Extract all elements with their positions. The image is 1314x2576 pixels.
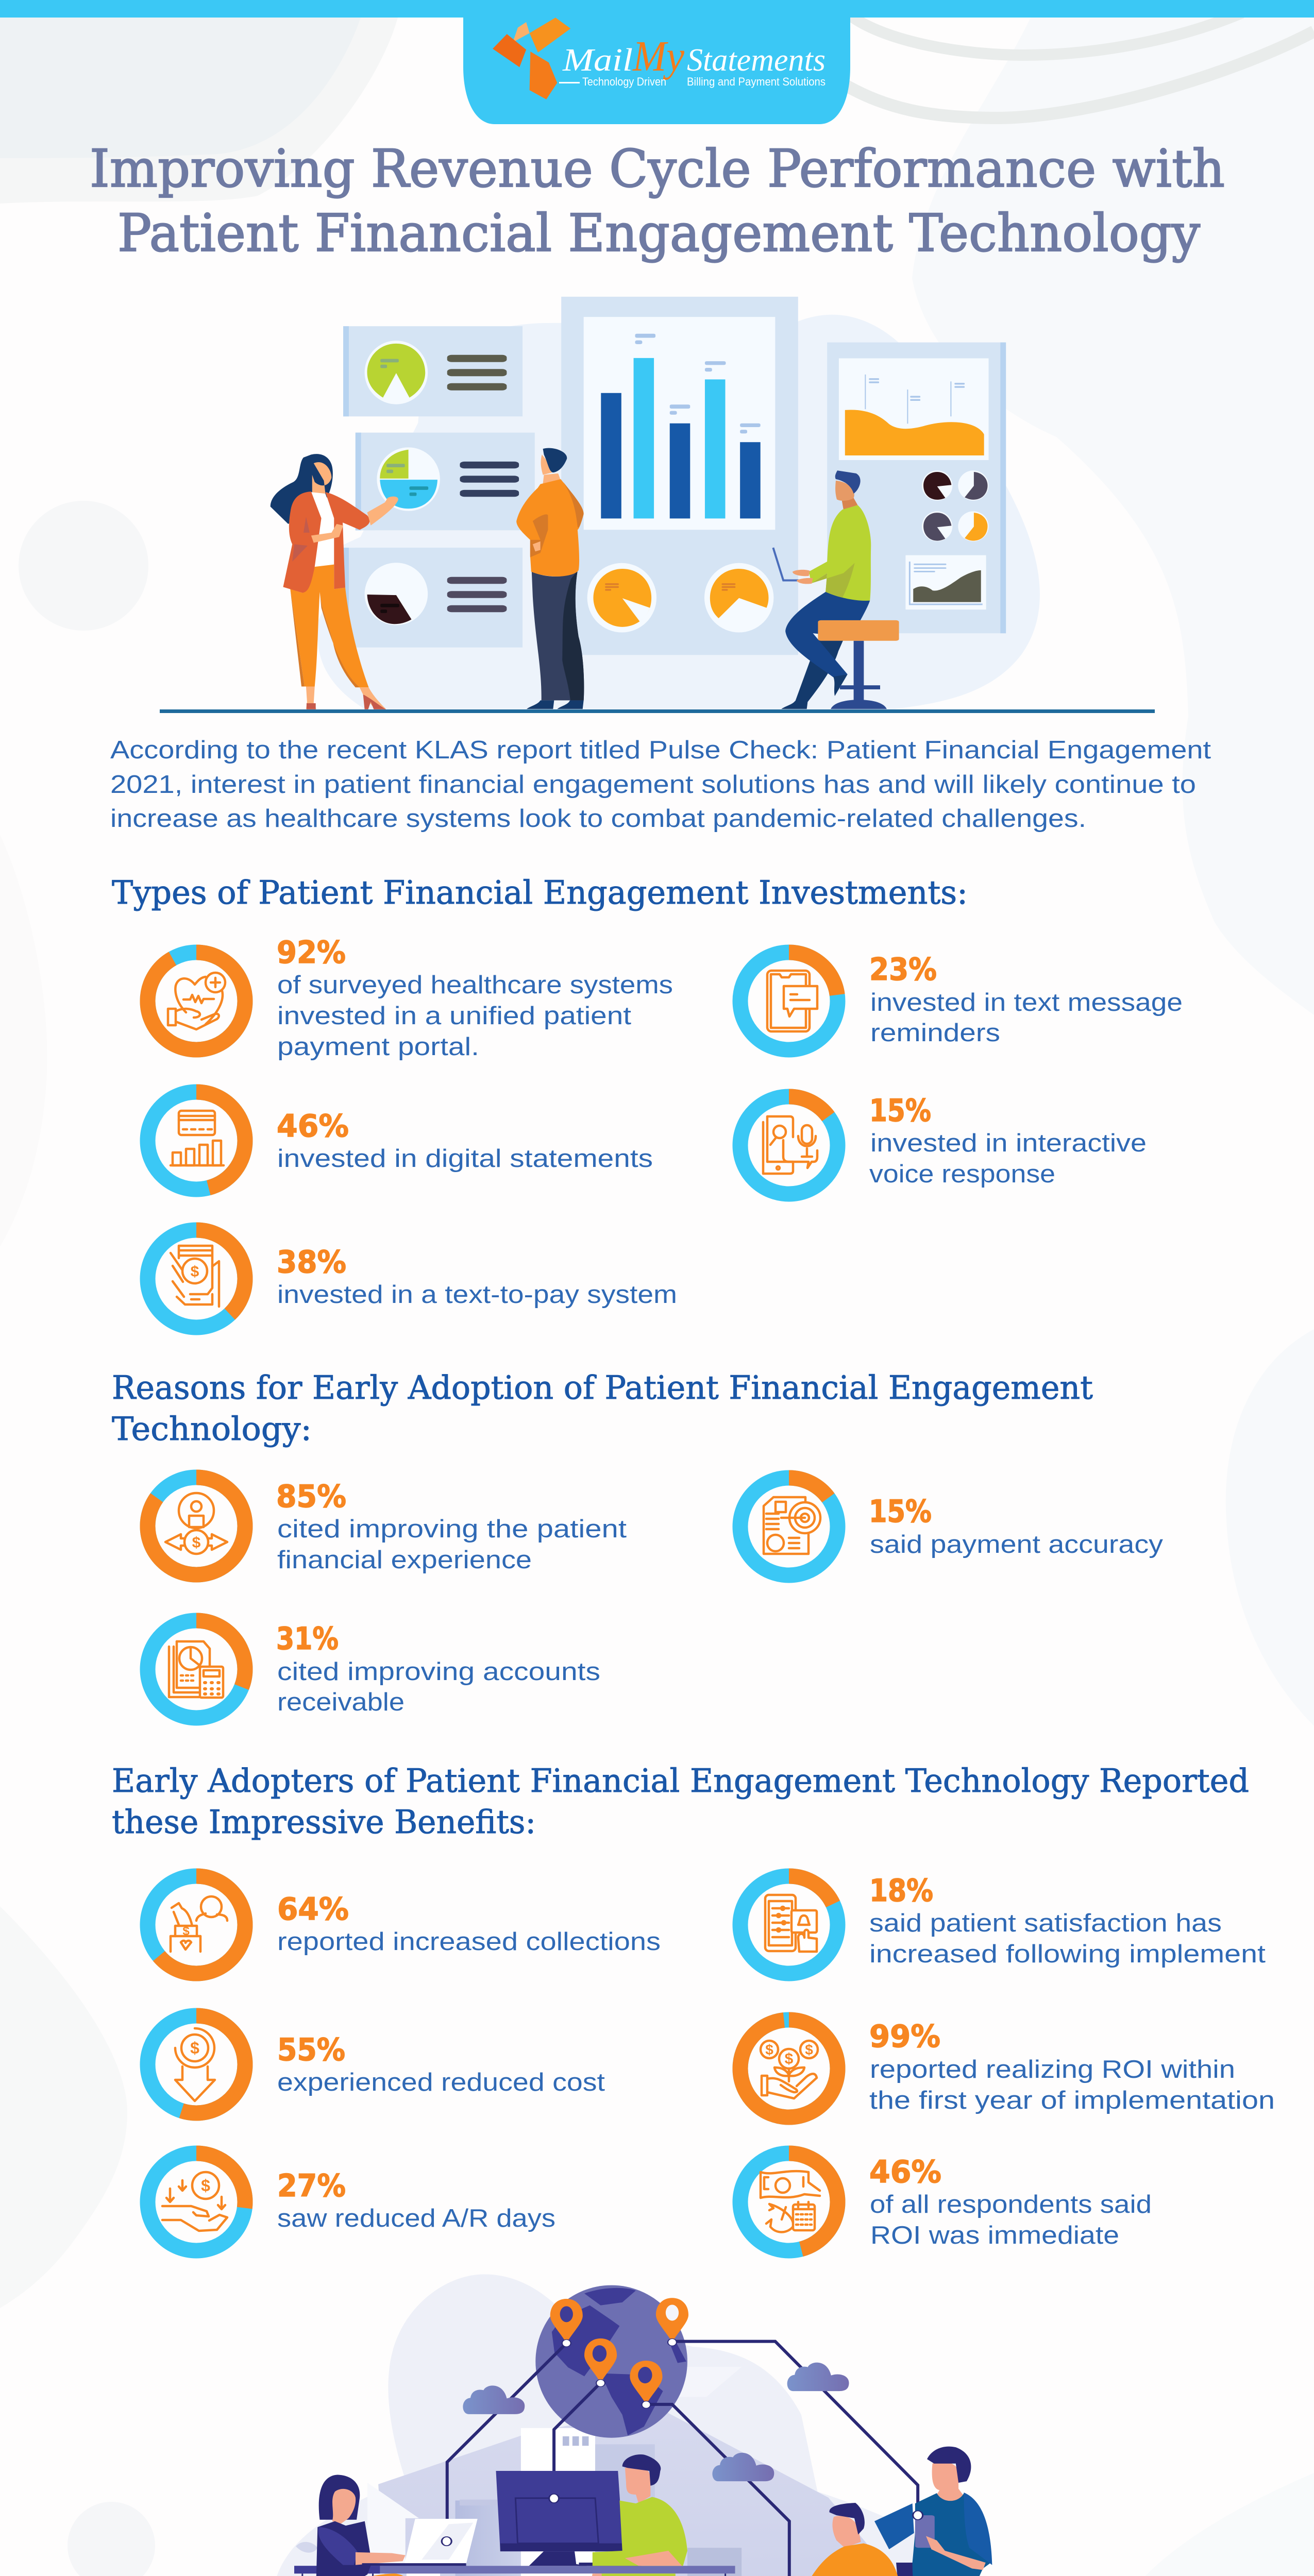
15% text: 15% bbox=[869, 1494, 932, 1530]
donut 15% with voice icon bbox=[740, 1096, 838, 1194]
18% text: said patient satisfaction has bbox=[869, 1909, 1222, 1937]
donut 99% with money plant icon: $ bbox=[805, 2042, 813, 2058]
99% text bbox=[869, 2019, 1275, 2114]
stat: 18% patient satisfaction bbox=[740, 1873, 1266, 1973]
46% text bbox=[277, 1108, 653, 1173]
38% text: 38% bbox=[277, 1244, 346, 1280]
stat: 27% reduced A/R days bbox=[147, 2154, 555, 2250]
logo wordmark: Statements bbox=[687, 43, 826, 78]
stat: 64% increased collections bbox=[147, 1876, 661, 1973]
top bar bbox=[0, 0, 1314, 18]
55% text: experienced reduced cost bbox=[277, 2069, 605, 2096]
64% text: 64% bbox=[277, 1891, 349, 1927]
monitor bbox=[496, 2471, 641, 2566]
intro paragraph: 2021, interest in patient financial engagement solutions has and will likely continue to bbox=[110, 771, 1196, 799]
64% text bbox=[277, 1891, 661, 1956]
46% text: 46% bbox=[277, 1108, 349, 1144]
stat: 15% interactive voice response bbox=[740, 1093, 1147, 1194]
panel: pie B bbox=[356, 433, 535, 530]
figure: standing man bbox=[516, 448, 584, 709]
stat: 38% text-to-pay bbox=[147, 1230, 677, 1327]
15% text: voice response bbox=[869, 1160, 1055, 1188]
donut 23% with phone message icon bbox=[740, 952, 838, 1050]
15% text: 15% bbox=[869, 1093, 931, 1129]
27% text: saw reduced A/R days bbox=[277, 2205, 555, 2232]
heading: reasons for early adoption: Reasons for Early Adoption of Patient Financial Engagement bbox=[112, 1369, 1093, 1406]
donut 15% with target document icon bbox=[740, 1478, 838, 1575]
donut 99% with money plant icon: $ bbox=[785, 2050, 794, 2067]
92% text: invested in a unified patient bbox=[277, 1002, 631, 1030]
location pins bbox=[550, 2298, 688, 2408]
illustration: team reviewing charts bbox=[160, 297, 1155, 713]
title: Patient Financial Engagement Technology bbox=[117, 203, 1200, 263]
donut 55% with coin and down arrow icon: $ bbox=[190, 2039, 199, 2057]
donut 46% with banknote and calendar icon bbox=[740, 2154, 838, 2250]
85% text bbox=[276, 1479, 627, 1574]
15% text: said payment accuracy bbox=[870, 1531, 1164, 1558]
background shapes bbox=[273, 2274, 1043, 2576]
stat: 55% reduced cost bbox=[147, 2015, 605, 2113]
stool bbox=[818, 620, 899, 709]
figure: woman at laptop bbox=[283, 2475, 479, 2576]
figure: seated man in orange bbox=[761, 2503, 920, 2576]
stat: 46% digital statements bbox=[147, 1092, 653, 1189]
23% text: reminders bbox=[870, 1019, 1000, 1047]
logo mark bbox=[493, 18, 570, 99]
99% text: reported realizing ROI within bbox=[870, 2056, 1235, 2083]
85% text: financial experience bbox=[277, 1546, 532, 1574]
intro paragraph: According to the recent KLAS report titled Pulse Check: Patient Financial Engagement bbox=[110, 736, 1211, 764]
donut 85% with person and coin icon bbox=[147, 1478, 245, 1574]
85% text: cited improving the patient bbox=[277, 1515, 627, 1543]
donut 92% with heart-in-hand icon bbox=[147, 952, 245, 1050]
logo tab bbox=[463, 15, 850, 124]
55% text bbox=[277, 2032, 605, 2096]
logo wordmark bbox=[559, 32, 826, 88]
27% text bbox=[277, 2168, 555, 2232]
logo wordmark: My bbox=[632, 32, 685, 80]
illustration: connected team and globe bbox=[159, 2274, 1155, 2576]
donut 99% with money plant icon bbox=[740, 2020, 838, 2117]
99% text: the first year of implementation bbox=[869, 2087, 1275, 2114]
heading: reasons for early adoption bbox=[112, 1369, 1093, 1448]
donut 38% with phone payment icon: $ bbox=[191, 1263, 199, 1280]
donut 64% with donation box icon bbox=[147, 1876, 245, 1973]
figure: woman in orange jacket bbox=[271, 454, 398, 709]
27% text: 27% bbox=[277, 2168, 346, 2204]
logo wordmark: Technology Driven bbox=[582, 75, 666, 88]
64% text: reported increased collections bbox=[277, 1928, 661, 1956]
heading: early adopters benefits: these Impressive Benefits: bbox=[112, 1803, 536, 1841]
floor line bbox=[160, 709, 1155, 713]
donut 27% with coin and hand icon bbox=[147, 2154, 245, 2250]
figure: standing man in green bbox=[587, 2454, 687, 2576]
device connection dots bbox=[442, 2494, 923, 2546]
globe bbox=[535, 2285, 687, 2438]
46% text bbox=[869, 2154, 1152, 2249]
logo wordmark: Billing and Payment Solutions bbox=[687, 75, 826, 88]
31% text bbox=[276, 1621, 600, 1716]
15% text: invested in interactive bbox=[870, 1129, 1147, 1157]
15% text bbox=[869, 1494, 1164, 1558]
stat: 85% patient financial experience bbox=[147, 1478, 627, 1574]
panel: bar chart bbox=[561, 297, 798, 655]
31% text: cited improving accounts bbox=[277, 1658, 600, 1686]
46% text: invested in digital statements bbox=[277, 1145, 653, 1173]
donut 27% with coin and hand icon: $ bbox=[201, 2176, 210, 2195]
intro paragraph bbox=[110, 736, 1211, 833]
92% text: payment portal. bbox=[277, 1033, 479, 1061]
31% text: receivable bbox=[277, 1688, 405, 1716]
donut 38% with phone payment icon bbox=[147, 1230, 245, 1327]
18% text bbox=[869, 1873, 1266, 1968]
logo wordmark: Mail bbox=[562, 43, 633, 78]
46% text: of all respondents said bbox=[870, 2191, 1152, 2218]
clouds bbox=[463, 2363, 849, 2481]
99% text: 99% bbox=[869, 2019, 940, 2055]
92% text bbox=[277, 935, 673, 1061]
18% text: 18% bbox=[869, 1873, 933, 1909]
heading: reasons for early adoption: Technology: bbox=[112, 1410, 312, 1448]
title: Improving Revenue Cycle Performance with bbox=[90, 139, 1225, 199]
stat: 46% immediate ROI bbox=[740, 2154, 1152, 2250]
18% text: increased following implement bbox=[869, 1940, 1266, 1968]
donut 18% with phone and bell icon bbox=[740, 1876, 838, 1973]
donut 99% with money plant icon: $ bbox=[765, 2042, 773, 2058]
15% text bbox=[869, 1093, 1147, 1188]
23% text bbox=[869, 952, 1183, 1047]
38% text: invested in a text-to-pay system bbox=[277, 1281, 677, 1309]
stat: 23% text reminders bbox=[740, 952, 1183, 1050]
intro paragraph: increase as healthcare systems look to combat pandemic-related challenges. bbox=[110, 805, 1086, 833]
title bbox=[90, 139, 1225, 263]
heading: types of investments: Types of Patient Financial Engagement Investments: bbox=[112, 874, 968, 911]
donut 64% with donation box icon: $ bbox=[182, 1924, 190, 1938]
donut 85% with person and coin icon: $ bbox=[192, 1534, 201, 1551]
stat: 92% unified payment portal bbox=[147, 935, 673, 1061]
92% text: of surveyed healthcare systems bbox=[277, 971, 673, 999]
desk bbox=[294, 2566, 735, 2576]
figure: standing man in blue bbox=[874, 2447, 1013, 2576]
connection lines bbox=[447, 2342, 918, 2576]
donut 55% with coin and down arrow icon bbox=[147, 2015, 245, 2113]
stat: 15% payment accuracy bbox=[740, 1478, 1164, 1575]
panel: pie A bbox=[343, 326, 523, 416]
55% text: 55% bbox=[277, 2032, 345, 2068]
panel: pie C bbox=[343, 548, 523, 648]
23% text: 23% bbox=[869, 952, 937, 988]
38% text bbox=[277, 1244, 677, 1309]
23% text: invested in text message bbox=[870, 989, 1183, 1016]
46% text: 46% bbox=[869, 2154, 941, 2190]
85% text: 85% bbox=[276, 1479, 346, 1515]
donut 46% with card and bars icon bbox=[147, 1092, 245, 1189]
background blob bbox=[317, 315, 1040, 709]
donut 31% with calculator document icon bbox=[147, 1621, 245, 1718]
heading: early adopters benefits: Early Adopters of Patient Financial Engagement Technology Reported bbox=[112, 1762, 1249, 1800]
foliage bbox=[274, 2542, 1040, 2576]
buildings bbox=[407, 2428, 742, 2576]
stat: 99% ROI first year bbox=[740, 2019, 1275, 2117]
46% text: ROI was immediate bbox=[870, 2222, 1119, 2249]
panel: area charts bbox=[827, 343, 1006, 633]
92% text: 92% bbox=[277, 935, 346, 971]
31% text: 31% bbox=[276, 1621, 339, 1657]
stat: 31% accounts receivable bbox=[147, 1621, 600, 1718]
heading: early adopters benefits bbox=[112, 1762, 1249, 1841]
figure: seated man with laptop bbox=[773, 470, 871, 709]
